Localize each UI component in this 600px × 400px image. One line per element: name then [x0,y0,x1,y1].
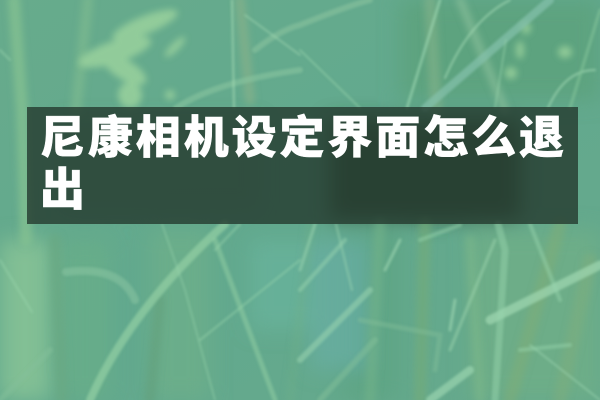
title: 尼康相机设定界面怎么退出 [40,112,567,215]
title banner [27,107,578,224]
